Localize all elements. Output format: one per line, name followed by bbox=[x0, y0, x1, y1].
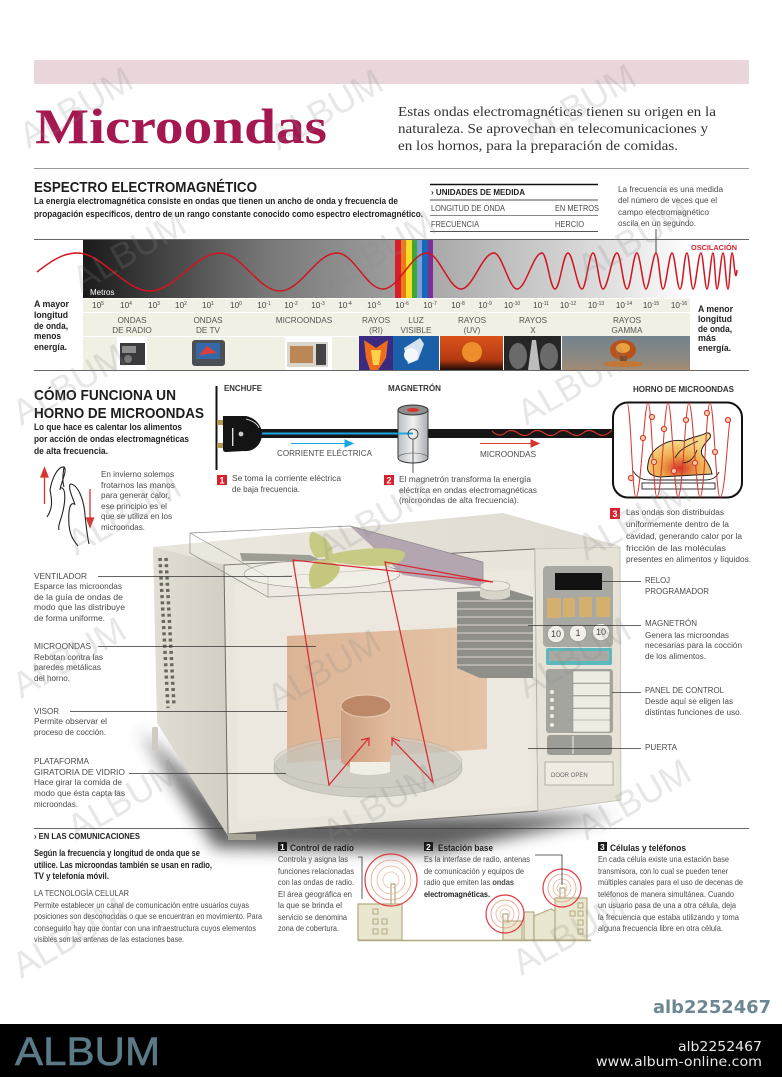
turntable bbox=[274, 736, 462, 797]
wavelength scale: -10 bbox=[513, 301, 520, 307]
label microondas: MICROONDAS bbox=[480, 449, 536, 459]
label enchufe: ENCHUFE bbox=[224, 384, 263, 393]
plug bbox=[217, 416, 262, 452]
watermarks: ALBUM bbox=[65, 202, 193, 300]
column: control de radio: El área geográfica en bbox=[278, 889, 352, 899]
wavelength scale: 10 bbox=[560, 301, 569, 310]
ground bbox=[358, 940, 591, 942]
watermarks: ALBUM bbox=[505, 885, 633, 983]
callout: reloj bbox=[645, 575, 709, 596]
wavelength scale: 10 bbox=[230, 301, 239, 310]
frequency note: del número de veces que el bbox=[618, 195, 717, 205]
callout: magnetron: de los alimentos. bbox=[645, 651, 706, 661]
how it works intro bbox=[34, 422, 189, 456]
callout: magnetron: necesarias para la cocción bbox=[645, 640, 742, 650]
watermarks: ALBUM bbox=[5, 335, 133, 433]
table: unidades de medida: HERCIO bbox=[555, 219, 584, 229]
wavelength scale: 10 bbox=[175, 301, 184, 310]
category row: RAYOS bbox=[458, 316, 487, 325]
step 2: El magnetrón transforma la energía bbox=[399, 474, 531, 484]
wavelength scale: 10 bbox=[367, 301, 376, 310]
callout: microondas: MICROONDAS bbox=[34, 641, 91, 651]
wavelength scale: 10 bbox=[504, 301, 513, 310]
column: control de radio: funciones relacionadas bbox=[278, 866, 354, 876]
wavelength scale: 10 bbox=[588, 301, 597, 310]
footer url: www.album-online.com bbox=[596, 1054, 762, 1070]
watermarks: ALBUM bbox=[262, 60, 390, 158]
callout: ventilador: de la guía de ondas de bbox=[34, 592, 123, 602]
process diagram bbox=[216, 384, 742, 498]
step 3: 3 bbox=[612, 509, 618, 519]
callout: plataforma: PLATAFORMA bbox=[34, 756, 89, 766]
cellular technology text: LA TECNOLOGÍA CELULAR bbox=[34, 888, 129, 898]
column: celulas y telefonos: múltiples canales para el uso de decenas de bbox=[598, 877, 743, 887]
image: x-ray bbox=[504, 336, 561, 370]
category row: ONDAS bbox=[193, 316, 223, 325]
hands note: ese principio es el bbox=[101, 501, 167, 511]
wavelength scale: -7 bbox=[432, 301, 437, 307]
label corriente: CORRIENTE ELÉCTRICA bbox=[277, 448, 372, 458]
column: estacion base: electromagnéticas. bbox=[424, 889, 490, 899]
table: unidades de medida: EN METROS bbox=[555, 203, 599, 213]
spectrum description bbox=[34, 196, 423, 219]
category row: GAMMA bbox=[612, 326, 643, 335]
callout: plataforma: Hace girar la comida de bbox=[34, 777, 122, 787]
column: control de radio bbox=[278, 842, 354, 933]
wavelength scale: 2 bbox=[184, 301, 187, 307]
callout: ventilador bbox=[34, 571, 125, 623]
column: control de radio: Controla y asigna las bbox=[278, 854, 348, 864]
wavelength scale: -4 bbox=[347, 301, 352, 307]
column: control de radio: servicio se denomina bbox=[278, 912, 347, 922]
column: estacion base bbox=[424, 842, 530, 899]
right note: energía. bbox=[698, 343, 731, 353]
hands note: frotarnos las manos bbox=[101, 480, 175, 490]
cellular technology text bbox=[34, 888, 262, 944]
magnetron fins bbox=[457, 581, 533, 678]
column: control de radio: con las ondas de radio. bbox=[278, 877, 354, 887]
wavelength scale: 10 bbox=[120, 301, 129, 310]
watermarks: ALBUM bbox=[60, 465, 188, 563]
wavelength scale: 10 bbox=[202, 301, 211, 310]
frequency note: oscila en un segundo. bbox=[618, 218, 696, 228]
column: estacion base: radio que emiten las ondas bbox=[424, 877, 514, 887]
oscillation wave bbox=[37, 253, 737, 291]
icon: tv bbox=[192, 340, 225, 366]
column: celulas y telefonos: la frecuencia que estaba utilizando y toma bbox=[598, 912, 739, 922]
display panel bbox=[543, 566, 613, 785]
teal row bbox=[546, 648, 612, 665]
spectrum band bbox=[83, 240, 690, 298]
wavelength scale: 10 bbox=[643, 301, 652, 310]
signal circles 3 bbox=[543, 869, 581, 907]
intro text: en los hornos, para la preparación de comidas. bbox=[398, 138, 678, 153]
column: estacion base: Estación base bbox=[438, 843, 493, 854]
cellular technology text: conseguirlo hay que contar con una infraestructura cuyos elementos bbox=[34, 923, 256, 933]
step 2: eléctrica en ondas electromagnéticas bbox=[399, 485, 537, 495]
image: explosion bbox=[562, 336, 690, 370]
watermarks: ALBUM bbox=[570, 470, 698, 568]
antenna scene bbox=[358, 854, 591, 940]
waves in oven bbox=[627, 403, 730, 497]
cellular technology text: posiciones son desconocidas o que se encuentran en movimiento. Para bbox=[34, 911, 262, 921]
callout: magnetron: Genera las microondas bbox=[645, 630, 729, 640]
heading: como funciona: HORNO DE MICROONDAS bbox=[34, 405, 204, 422]
table: unidades de medida: LONGITUD DE ONDA bbox=[431, 203, 505, 213]
function buttons bbox=[546, 669, 613, 733]
category row: X bbox=[530, 326, 536, 335]
column: celulas y telefonos: Células y teléfonos bbox=[610, 843, 686, 854]
column: celulas y telefonos: un usuario pasa de una a otra célula, deja bbox=[598, 900, 736, 910]
callout: visor: VISOR bbox=[34, 706, 59, 716]
wavelength scale: -9 bbox=[487, 301, 492, 307]
column: celulas y telefonos: alguna frecuencia libre en otra célula. bbox=[598, 923, 723, 933]
wall line bbox=[216, 386, 218, 470]
callout: microondas bbox=[34, 641, 103, 683]
communications intro: Según la frecuencia y longitud de onda que se bbox=[34, 848, 200, 858]
icon: rubbing hands bbox=[41, 467, 94, 546]
tray bbox=[642, 483, 715, 489]
callout: panel de control: distintas funciones de uso. bbox=[645, 707, 742, 717]
frequency note: campo electromagnético bbox=[618, 207, 709, 217]
step 1: Se toma la corriente eléctrica bbox=[232, 473, 341, 483]
door open button bbox=[545, 762, 613, 785]
wavelength scale: -12 bbox=[569, 301, 576, 307]
start row bbox=[547, 735, 612, 755]
watermarks bbox=[5, 55, 698, 986]
intro text: naturaleza. Se aprovechan en telecomunicaciones y bbox=[398, 121, 708, 136]
wavelength scale: 3 bbox=[157, 301, 160, 307]
image row bbox=[83, 336, 690, 370]
oscillation leader bbox=[655, 229, 657, 253]
watermarks: ALBUM bbox=[510, 608, 638, 706]
chicken bbox=[648, 433, 712, 477]
right note: de onda, bbox=[698, 324, 732, 334]
wavelength scale: -3 bbox=[320, 301, 325, 307]
callout: plataforma bbox=[34, 756, 125, 809]
wavelength scale: -13 bbox=[597, 301, 604, 307]
step 3: fricción de las moléculas bbox=[626, 543, 726, 553]
red arrow bbox=[480, 440, 539, 447]
column: control de radio: la que se brinda el bbox=[278, 900, 342, 910]
callout: microondas: Rebotan contra las bbox=[34, 652, 103, 662]
title: Microondas bbox=[35, 98, 327, 154]
callout: reloj: RELOJ bbox=[645, 575, 670, 585]
hands note bbox=[101, 469, 175, 532]
category row: DE TV bbox=[196, 326, 221, 335]
category row: MICROONDAS bbox=[276, 316, 333, 325]
step 2: (microondas de alta frecuencia). bbox=[399, 495, 519, 505]
wavelength scale: 0 bbox=[239, 301, 242, 307]
callout: visor bbox=[34, 706, 107, 737]
table: unidades de medida: FRECUENCIA bbox=[431, 219, 479, 229]
wavelength scale: 4 bbox=[129, 301, 132, 307]
hands note: para generar calor, bbox=[101, 490, 170, 500]
step 3: uniformemente dentro de la bbox=[626, 519, 729, 529]
display panel: 10 bbox=[551, 629, 561, 639]
label horno: HORNO DE MICROONDAS bbox=[633, 385, 735, 394]
left note: longitud bbox=[34, 310, 68, 320]
callout: panel de control bbox=[645, 685, 742, 717]
microwave illustration bbox=[140, 513, 621, 852]
right note: longitud bbox=[698, 314, 732, 324]
left note: menos bbox=[34, 331, 61, 341]
wavelength scale: -6 bbox=[404, 301, 409, 307]
cable bbox=[258, 429, 612, 438]
hands note: En invierno solemos bbox=[101, 469, 174, 479]
step 3 bbox=[610, 507, 751, 564]
left note: energía. bbox=[34, 342, 67, 352]
shadow bbox=[140, 730, 615, 852]
column: celulas y telefonos: 3 bbox=[600, 842, 605, 852]
callout: ventilador: Esparce las microondas bbox=[34, 581, 122, 591]
magnetron cylinder bbox=[398, 405, 428, 473]
wavelength scale: 10 bbox=[423, 301, 432, 310]
category row: RAYOS bbox=[362, 316, 391, 325]
how it works intro: por acción de ondas electromagnéticas bbox=[34, 434, 189, 444]
oscilacion label: OSCILACIÓN bbox=[691, 243, 737, 252]
icon: radio bbox=[117, 337, 147, 370]
wavelength scale: 10 bbox=[671, 301, 680, 310]
callout: plataforma: GIRATORIA DE VIDRIO bbox=[34, 767, 125, 777]
column: celulas y telefonos: En cada célula existe una estación base bbox=[598, 854, 729, 864]
top bbox=[153, 513, 620, 565]
category row: (RI) bbox=[369, 326, 383, 335]
side latch bbox=[152, 727, 158, 751]
how it works intro: de alta frecuencia. bbox=[34, 446, 108, 456]
image: sun bbox=[440, 336, 503, 370]
watermarks: ALBUM bbox=[510, 335, 638, 433]
arrow down bbox=[86, 489, 94, 527]
wavelength scale: 10 bbox=[284, 301, 293, 310]
column: celulas y telefonos: transmisora, con lo cual se pueden tener bbox=[598, 866, 728, 876]
callout: plataforma: microondas. bbox=[34, 799, 78, 809]
wavelength scale: 10 bbox=[451, 301, 460, 310]
wavelength scale: 10 bbox=[257, 301, 266, 310]
watermarks: ALBUM bbox=[5, 608, 133, 706]
category row: RAYOS bbox=[613, 316, 642, 325]
wavelength scale: -14 bbox=[625, 301, 632, 307]
callout: ventilador: modo que las distribuye bbox=[34, 602, 125, 612]
intro text bbox=[398, 104, 716, 153]
spectrum description: La energía electromagnética consiste en ondas que tienen un ancho de onda y frecuencia de bbox=[34, 196, 398, 206]
leader 2 bbox=[535, 855, 562, 885]
cellular technology text: visibles son las antenas de las estaciones base. bbox=[34, 934, 184, 944]
watermarks: ALBUM bbox=[570, 750, 698, 848]
control panel body bbox=[535, 547, 621, 811]
watermarks: ALBUM bbox=[12, 58, 140, 156]
signal circles 2 bbox=[486, 895, 524, 933]
step 2: 2 bbox=[386, 476, 392, 486]
rainbow bbox=[395, 240, 433, 298]
wavelength scale: 10 bbox=[395, 301, 404, 310]
watermarks: ALBUM bbox=[60, 750, 188, 848]
callout leaders bbox=[70, 576, 641, 774]
spectrum description: propagación específicos, dentro de un rango constante conocido como espectro electromagnético. bbox=[34, 209, 423, 219]
blue current bbox=[262, 432, 414, 434]
wavelength scale: -8 bbox=[460, 301, 465, 307]
callout: microondas: paredes metálicas bbox=[34, 662, 101, 672]
wavelength scale: -15 bbox=[652, 301, 659, 307]
watermarks: ALBUM bbox=[515, 55, 643, 153]
fan bbox=[240, 532, 405, 589]
callout: puerta: PUERTA bbox=[645, 742, 677, 752]
callout: ventilador: VENTILADOR bbox=[34, 571, 87, 581]
callout: reloj: PROGRAMADOR bbox=[645, 586, 709, 596]
display panel: 10 bbox=[596, 627, 606, 637]
right note: A menor bbox=[698, 304, 733, 314]
waveguide bbox=[190, 526, 483, 597]
hands note: que se utiliza en los bbox=[101, 511, 172, 521]
blue arrow bbox=[291, 440, 353, 447]
wavelength scale: 5 bbox=[101, 301, 104, 307]
callout: microondas: del horno. bbox=[34, 673, 70, 683]
communications intro: utilice. Las microondas también se usan en radio, bbox=[34, 860, 212, 870]
table: unidades de medida bbox=[430, 184, 599, 232]
display panel: DOOR OPEN bbox=[551, 773, 588, 779]
communications heading: › EN LAS COMUNICACIONES bbox=[34, 832, 141, 841]
heading: espectro electromagnetico: ESPECTRO ELECTROMAGNÉTICO bbox=[34, 179, 257, 196]
watermarks: ALBUM bbox=[310, 470, 438, 568]
image: lamp bbox=[393, 336, 439, 370]
viewing window bbox=[287, 626, 487, 763]
header band bbox=[34, 60, 749, 84]
wavelength scale: -2 bbox=[293, 301, 298, 307]
wavelength scale: -5 bbox=[376, 301, 381, 307]
step 3: cavidad, generando calor por la bbox=[626, 531, 742, 541]
watermarks: ALBUM bbox=[315, 202, 443, 300]
column: estacion base: Es la interfase de radio, antenas bbox=[424, 854, 530, 864]
clock display bbox=[555, 573, 602, 590]
arrow up bbox=[41, 468, 48, 504]
category row: ONDAS bbox=[117, 316, 147, 325]
left note: A mayor bbox=[34, 299, 69, 309]
wavelength scale: 10 bbox=[92, 301, 101, 310]
communications intro: TV y telefonía móvil. bbox=[34, 871, 109, 881]
category row: DE RADIO bbox=[112, 326, 152, 335]
callout: magnetron bbox=[645, 618, 742, 661]
image id: alb2252467 bbox=[653, 997, 771, 1018]
windows bbox=[373, 903, 583, 934]
wavelength scale: 10 bbox=[478, 301, 487, 310]
callout: visor: proceso de cocción. bbox=[34, 727, 106, 737]
molecules bbox=[628, 410, 731, 481]
callout: magnetron: MAGNETRÓN bbox=[645, 618, 697, 628]
buildings bbox=[358, 898, 587, 940]
column: estacion base: de comunicación y equipos de bbox=[424, 866, 524, 876]
right note bbox=[698, 304, 733, 353]
left note: de onda, bbox=[34, 321, 68, 331]
category row: (UV) bbox=[464, 326, 481, 335]
wavelength scale: -16 bbox=[680, 301, 687, 307]
heading: como funciona bbox=[34, 386, 204, 422]
step 1 bbox=[217, 473, 341, 494]
callout: panel de control: PANEL DE CONTROL bbox=[645, 685, 724, 695]
wavelength scale: 10 bbox=[533, 301, 542, 310]
footer bar bbox=[0, 1024, 782, 1077]
wavelength scale bbox=[83, 299, 690, 312]
label magnetron: MAGNETRÓN bbox=[388, 384, 441, 393]
feet bbox=[228, 834, 256, 840]
album logo: ALBUM bbox=[15, 1030, 160, 1074]
column: control de radio: zona de cobertura. bbox=[278, 923, 339, 933]
callout: panel de control: Desde aquí se eligen las bbox=[645, 696, 733, 706]
step 3: presentes en alimentos y líquidos. bbox=[626, 554, 751, 564]
wavelength scale: 1 bbox=[211, 301, 214, 307]
table: unidades de medida: › UNIDADES DE MEDIDA bbox=[431, 188, 525, 197]
wavelength scale: -1 bbox=[266, 301, 271, 307]
watermarks: ALBUM bbox=[570, 190, 698, 288]
category row: RAYOS bbox=[519, 316, 548, 325]
watermarks: ALBUM bbox=[5, 888, 133, 986]
callout: plataforma: modo que ésta capta las bbox=[34, 788, 125, 798]
leader 1 bbox=[358, 857, 362, 899]
cup bbox=[341, 695, 391, 775]
wavelength scale: 10 bbox=[311, 301, 320, 310]
side vents bbox=[160, 558, 174, 708]
step 1: de baja frecuencia. bbox=[232, 484, 300, 494]
callout: visor: Permite observar el bbox=[34, 716, 107, 726]
watermarks: ALBUM bbox=[260, 620, 388, 718]
column: celulas y telefonos: teléfonos de manera simultánea. Cuando bbox=[598, 889, 734, 899]
microwave ray paths bbox=[293, 560, 493, 785]
metros label: Metros bbox=[90, 288, 114, 297]
column: estacion base: 2 bbox=[426, 842, 431, 852]
step 1: 1 bbox=[220, 476, 225, 486]
right note: más bbox=[698, 333, 716, 343]
column: control de radio: Control de radio bbox=[290, 843, 354, 854]
image: infrared bbox=[359, 336, 393, 370]
category row: VISIBLE bbox=[401, 326, 432, 335]
platter bbox=[633, 471, 719, 480]
door bbox=[224, 549, 538, 834]
wavelength scale: 10 bbox=[616, 301, 625, 310]
category row bbox=[83, 313, 690, 336]
cellular technology text: Permite establecer un canal de comunicación entre usuarios cuyas bbox=[34, 900, 249, 910]
communications intro bbox=[34, 848, 212, 881]
oven box bbox=[613, 402, 742, 498]
wavelength scale: 10 bbox=[148, 301, 157, 310]
column: celulas y telefonos bbox=[598, 842, 743, 933]
side bbox=[153, 547, 228, 836]
category row: LUZ bbox=[408, 316, 424, 325]
door inner bbox=[235, 570, 533, 821]
step 3: Las ondas son distribuidas bbox=[626, 507, 724, 517]
wavelength scale: -11 bbox=[542, 301, 549, 307]
frequency note: La frecuencia es una medida bbox=[618, 184, 723, 194]
frequency note bbox=[618, 184, 723, 228]
icon: microwave bbox=[285, 337, 332, 370]
wavelength scale: 10 bbox=[338, 301, 347, 310]
column: control de radio: 1 bbox=[280, 842, 285, 852]
step 2 bbox=[384, 474, 537, 505]
signal circles 1 bbox=[365, 854, 417, 906]
microwave signal on cable bbox=[492, 403, 628, 436]
callout: ventilador: de forma uniforme. bbox=[34, 613, 105, 623]
intro text: Estas ondas electromagnéticas tienen su origen en la bbox=[398, 104, 716, 119]
watermarks: ALBUM bbox=[315, 755, 443, 853]
display panel: 1 bbox=[575, 628, 581, 638]
antennas bbox=[391, 884, 565, 923]
left note bbox=[34, 299, 69, 352]
hands note: microondas. bbox=[101, 522, 145, 532]
heading: como funciona: CÓMO FUNCIONA UN bbox=[34, 386, 176, 404]
how it works intro: Lo que hace es calentar los alimentos bbox=[34, 422, 182, 432]
footer id: alb2252467 bbox=[678, 1039, 762, 1055]
